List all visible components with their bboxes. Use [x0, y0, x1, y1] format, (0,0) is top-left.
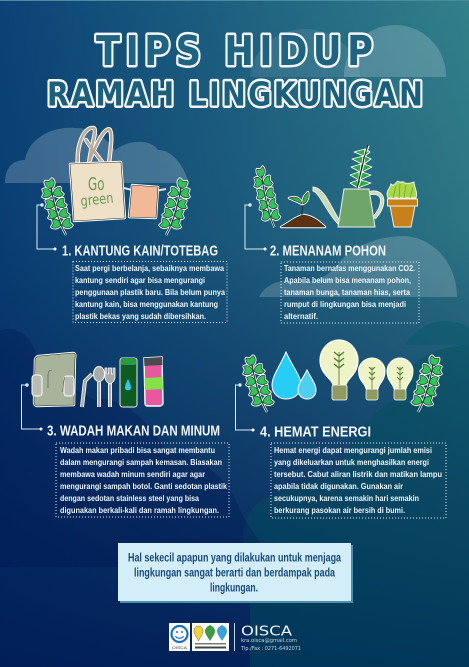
- text box: rumput di lingkungan bisa menjadi: [284, 299, 406, 309]
- icon: fern: [350, 145, 372, 189]
- panel: wadah makan dan minum: [22, 353, 229, 517]
- text box: secukupnya, karena semakin hari semakin: [274, 493, 419, 503]
- contact: Tlp./Fax : 0271-6492071: [240, 646, 301, 652]
- icon: right sprig: [411, 355, 443, 412]
- logo: oisca: OISCA: [172, 645, 187, 650]
- panel: menanam pohon: [245, 145, 419, 323]
- icon: sprig: [254, 166, 280, 227]
- text box: dengan sedotan stainless steel yang bisa: [60, 493, 199, 503]
- text box: [56, 443, 229, 517]
- title: [47, 29, 423, 114]
- icon: fork: [105, 368, 115, 407]
- contact: [240, 624, 301, 652]
- icon: totebag: [70, 128, 125, 221]
- icon: sprout: [281, 192, 325, 227]
- panel: hemat energi: [236, 340, 446, 518]
- text box: Wadah makan pribadi bisa sangat membantu: [60, 445, 215, 455]
- text box: [281, 262, 419, 323]
- text box: apabila tidak digunakan. Gunakan air: [274, 481, 404, 491]
- text box: Apabila belum bisa menanam pohon,: [284, 275, 411, 285]
- icon: medium bulb: [358, 358, 385, 400]
- icon: lunch box: [32, 353, 75, 406]
- text box: Hemat energi dapat mengurangi jumlah emisi: [274, 445, 432, 455]
- text box: kantung sendiri agar bisa mengurangi: [75, 275, 205, 285]
- icon: straw: [82, 374, 92, 407]
- text box: yang dikeluarkan untuk menghasilkan energi: [274, 457, 429, 467]
- heading: 1. KANTUNG KAIN/TOTEBAG: [62, 242, 218, 260]
- icon: small water drop: [298, 370, 316, 399]
- connector: [37, 203, 56, 250]
- text box: membawa wadah minum sendiri agar agar: [60, 469, 206, 479]
- icon: green bottle: [120, 358, 137, 407]
- text box: kantung kain, bisa menggunakan kantung: [75, 299, 218, 309]
- icon: left sprig: [41, 178, 73, 235]
- connector: [22, 383, 42, 430]
- heading: 3. WADAH MAKAN DAN MINUM: [47, 422, 220, 440]
- panel: kantung kain: [37, 128, 227, 322]
- heading: 2. MENANAM POHON: [270, 242, 386, 260]
- callout: lingkungan sangat berarti dan berdampak pada: [134, 566, 335, 580]
- text box: [271, 443, 446, 518]
- text box: mengurangi sampah botol. Ganti sedotan plastik: [60, 481, 227, 491]
- text box: tersebut. Cabut aliran listrik dan matikan lampu: [274, 469, 442, 479]
- text box: Tanaman bernafas menggunakan CO2.: [284, 263, 415, 273]
- icon: small bulb: [387, 358, 413, 400]
- title: TIPS HIDUP: [96, 29, 373, 76]
- icon: watering can: [313, 145, 382, 227]
- icon: totebag: green: [80, 190, 114, 210]
- logo: children's forest program: [192, 623, 229, 651]
- connector: [245, 203, 266, 250]
- text box: plastik bekas yang sudah dibersihkan.: [75, 311, 206, 321]
- heading: 4. HEMAT ENERGI: [260, 424, 371, 440]
- icon: pouch: [124, 185, 166, 218]
- contact: kra.oisca@gmail.com: [241, 638, 297, 644]
- text box: dalam mengurangi sampah kemasan. Biasakan: [60, 457, 222, 467]
- icon: totebag: Go: [88, 174, 105, 195]
- icon: large water drop: [272, 352, 301, 399]
- text box: digunakan berkali-kali dan ramah lingkungan.: [60, 505, 219, 515]
- text box: penggunaan plastik baru. Bila belum punya: [75, 287, 225, 297]
- text box: tanaman bunga, tanaman hias, serta: [284, 287, 410, 297]
- icon: right sprig: [159, 178, 191, 235]
- connector: [236, 383, 254, 432]
- icon: large bulb: [320, 340, 358, 400]
- callout: Hal sekecil apapun yang dilakukan untuk menjaga: [128, 550, 341, 564]
- text box: [73, 262, 227, 322]
- icon: tumbler: [144, 357, 163, 406]
- callout: lingkungan.: [210, 580, 258, 594]
- callout: [118, 543, 353, 603]
- text box: Saat pergi berbelanja, sebaiknya membawa: [75, 263, 224, 273]
- icon: left sprig: [242, 355, 274, 412]
- footer logos and contact: [169, 623, 301, 652]
- text box: berkurang pasokan air bersih di bumi.: [274, 505, 405, 515]
- text box: alternatif.: [284, 311, 318, 321]
- contact: OISCA: [241, 624, 292, 640]
- icon: spoon: [94, 366, 104, 407]
- title: RAMAH LINGKUNGAN: [47, 75, 423, 114]
- icon: potted succulent: [387, 181, 418, 227]
